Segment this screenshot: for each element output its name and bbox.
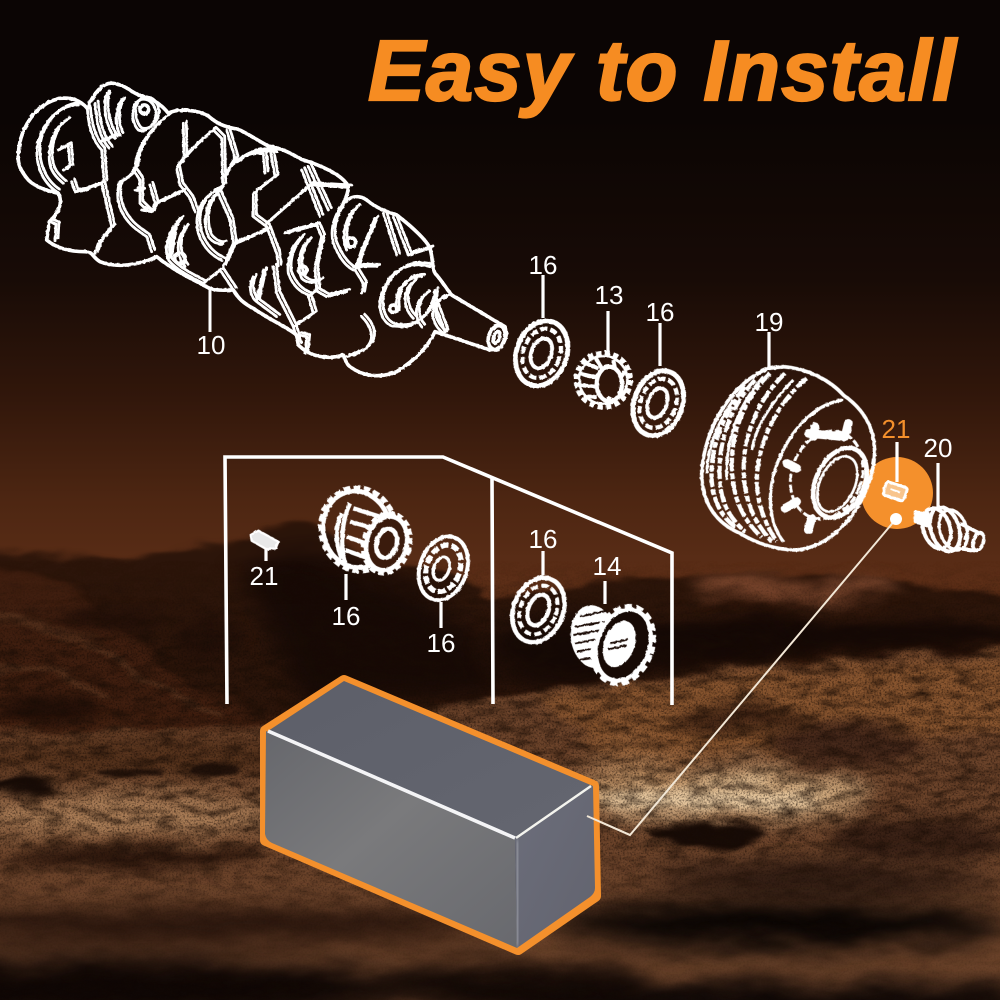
background: upper right ridge xyxy=(540,655,1000,760)
label: part 16 lower middle: 16 xyxy=(427,628,455,658)
background: bright sand xyxy=(600,788,820,812)
label: part 14: 14 xyxy=(593,551,621,581)
background: terrain base xyxy=(0,610,1000,1000)
label: part 16 lower left: 16 xyxy=(332,601,360,631)
callout leader line xyxy=(587,519,896,835)
background: terrain xyxy=(0,525,1000,1000)
background: lower left lit ground xyxy=(0,740,330,837)
background: lower ground bands xyxy=(0,901,1000,1000)
diagram: washer 16 upper left xyxy=(507,313,577,393)
product: steel key block xyxy=(265,681,595,949)
background: foreground terrain xyxy=(0,653,1000,1000)
diagram: gear 14 xyxy=(566,597,665,693)
background: mottled texture xyxy=(0,577,1000,970)
label: part 10: 10 xyxy=(197,330,225,360)
background: left mound shadows xyxy=(0,610,245,724)
diagram: key 21 small xyxy=(251,531,278,549)
highlight: orange circle xyxy=(861,457,933,529)
leader lines: upper parts xyxy=(543,275,938,506)
label: part 16 lower right: 16 xyxy=(529,524,557,554)
block end face xyxy=(515,786,595,948)
diagram: bracket frame xyxy=(225,457,672,705)
callout leader end on block xyxy=(587,816,630,835)
label: part 19: 19 xyxy=(755,307,783,337)
label: part 10 xyxy=(197,290,225,360)
label: part 16 upper right: 16 xyxy=(646,297,674,327)
diagram: gear lower left xyxy=(313,481,417,579)
background: lit far ridge xyxy=(680,576,905,603)
block edge highlights xyxy=(268,731,515,838)
diagram: washer lower right xyxy=(503,570,574,650)
background: near-black hill band xyxy=(240,550,1000,700)
lower parts xyxy=(251,481,665,693)
label: part 20: 20 xyxy=(924,433,952,463)
leader lines: lower parts xyxy=(266,548,605,628)
background: distant hills xyxy=(0,525,1000,800)
background: dark patches xyxy=(0,709,1000,896)
diagram: washer 16 upper right xyxy=(624,364,692,443)
diagram: key 21 highlighted xyxy=(882,481,908,501)
diagram: crankshaft xyxy=(18,83,508,376)
diagram: bolt 20 xyxy=(915,503,986,555)
diagram: pulley 19 xyxy=(702,367,877,550)
label: part 16 upper left: 16 xyxy=(529,250,557,280)
callout dot xyxy=(890,513,902,525)
upper parts row xyxy=(507,313,986,555)
label: part 13: 13 xyxy=(595,280,623,310)
background: left mound xyxy=(0,567,300,767)
label: part 21 highlighted: 21 xyxy=(882,414,910,444)
block top face xyxy=(268,681,593,838)
block front face xyxy=(265,731,517,948)
diagram: gear 13 xyxy=(576,353,631,407)
background: left mound ridges xyxy=(0,621,220,715)
diagram: washer lower middle xyxy=(410,530,476,607)
label: part 21: 21 xyxy=(250,561,278,591)
block outline xyxy=(266,681,595,949)
title: Easy to Install xyxy=(368,24,958,119)
background: fine grain xyxy=(0,560,1000,1000)
background: sunlit band xyxy=(570,754,870,821)
